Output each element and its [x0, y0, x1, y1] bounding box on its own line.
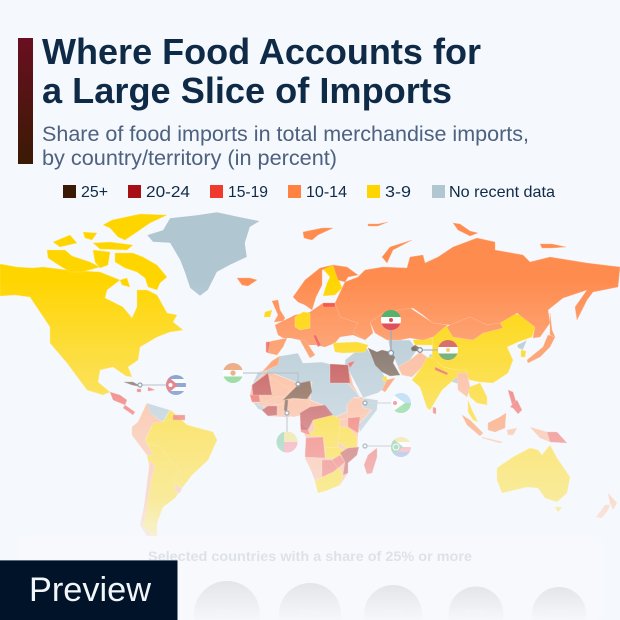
title [42, 31, 481, 111]
callout: Benin [276, 411, 298, 453]
panel heading: Selected countries with a share of 25% or more [148, 549, 473, 564]
map: 15-19 percent regions [110, 303, 567, 477]
callout: Niger [223, 363, 300, 386]
callout: Tajikistan [418, 340, 458, 360]
value circle: 29% [364, 585, 422, 620]
subtitle: by country/territory (in percent) [42, 147, 337, 170]
map: no recent data regions [147, 212, 527, 432]
legend item: 3-9: 3-9 [385, 184, 411, 201]
preview badge: Preview [29, 571, 151, 609]
legend item: no recent data: No recent data [449, 184, 555, 201]
value circle: 38%: 38% [216, 608, 238, 620]
legend item: 10-14 [288, 184, 347, 201]
callout: Djibouti [363, 393, 411, 413]
preview badge [0, 560, 178, 620]
title: Where Food Accounts for [42, 31, 481, 72]
legend item: 20-24 [128, 184, 190, 201]
legend item: 20-24: 20-24 [146, 184, 190, 201]
value circle: 38% [194, 581, 260, 620]
accent bar [18, 38, 33, 164]
legend [63, 184, 555, 201]
fade overlay [0, 280, 620, 620]
callout: Comoros [363, 437, 411, 457]
value circle: 29%: 29% [382, 608, 404, 620]
map: 10-14 percent regions [237, 222, 620, 436]
map: 3-9 percent regions [0, 214, 570, 512]
value circle: 25% [532, 587, 586, 620]
subtitle: Share of food imports in total merchandise imports, [42, 123, 529, 146]
map: light orange regions [132, 352, 617, 538]
value circle: 26% [448, 586, 504, 620]
legend item: 10-14: 10-14 [306, 184, 347, 201]
callout: Cuba [138, 375, 186, 395]
legend item: 15-19: 15-19 [228, 184, 268, 201]
value circle: 33% [279, 583, 341, 620]
value circle: 26%: 26% [465, 608, 487, 620]
legend item: 15-19 [210, 184, 268, 201]
subtitle [42, 123, 529, 170]
legend item: 25+ [63, 184, 108, 201]
callout: Iran [381, 310, 401, 356]
legend item: 3-9 [367, 184, 411, 201]
map: 25+ percent regions [124, 345, 420, 413]
world map [0, 212, 620, 538]
value circle: 25%: 25% [548, 608, 570, 620]
map: 20-24 percent regions [252, 364, 359, 475]
legend item: 25+: 25+ [81, 184, 108, 201]
value circle: 33%: 33% [299, 608, 321, 620]
title: a Large Slice of Imports [42, 70, 452, 111]
panel: selected countries [17, 536, 603, 620]
map: continent base fills [132, 303, 378, 538]
